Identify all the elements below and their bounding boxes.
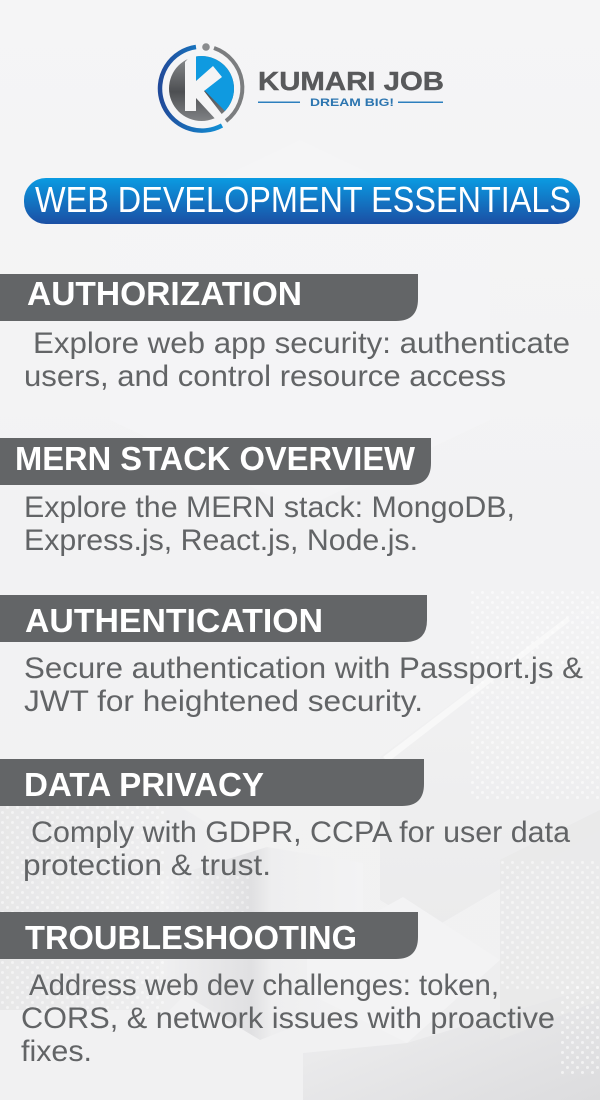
tagline: DREAM BIG! bbox=[310, 97, 394, 109]
text: troubleshooting: CORS, & network issues with proactive bbox=[21, 1002, 555, 1035]
text: mern stack: Express.js, React.js, Node.js. bbox=[24, 524, 418, 557]
text: authorization bbox=[24, 327, 570, 393]
text: data privacy: protection & trust. bbox=[23, 849, 271, 882]
section: mern stack bbox=[0, 438, 515, 557]
heading: troubleshooting: TROUBLESHOOTING bbox=[25, 920, 357, 957]
heading: mern stack: MERN STACK OVERVIEW bbox=[15, 441, 415, 478]
heading: authorization bbox=[0, 274, 418, 321]
section: authentication bbox=[0, 595, 583, 718]
text: authentication: Secure authentication with Passport.js & bbox=[24, 652, 583, 685]
text: troubleshooting: fixes. bbox=[21, 1035, 92, 1068]
text: mern stack bbox=[24, 491, 515, 557]
heading: authentication bbox=[0, 595, 427, 642]
section: data privacy bbox=[0, 759, 571, 882]
heading: data privacy: DATA PRIVACY bbox=[24, 767, 264, 804]
heading: troubleshooting bbox=[0, 912, 418, 959]
text: data privacy bbox=[23, 816, 571, 882]
heading: data privacy bbox=[0, 759, 424, 806]
section: troubleshooting bbox=[0, 912, 555, 1068]
text: authentication: JWT for heightened security. bbox=[24, 685, 423, 718]
wordmark: KUMARI JOB bbox=[258, 68, 444, 96]
text: authorization: users, and control resource access bbox=[24, 360, 506, 393]
heading: authorization: AUTHORIZATION bbox=[27, 276, 302, 313]
text: data privacy: Comply with GDPR, CCPA for user data bbox=[31, 816, 571, 849]
text: authorization: Explore web app security: authenticate bbox=[33, 327, 570, 360]
icon: K emblem bbox=[160, 43, 242, 131]
logo bbox=[160, 43, 444, 131]
text: troubleshooting bbox=[21, 969, 555, 1068]
text: mern stack: Explore the MERN stack: MongoDB, bbox=[24, 491, 515, 524]
text: authentication bbox=[24, 652, 583, 718]
text: troubleshooting: Address web dev challenges: token, bbox=[29, 969, 499, 1002]
heading: authentication: AUTHENTICATION bbox=[25, 603, 323, 640]
section: authorization bbox=[0, 274, 570, 393]
